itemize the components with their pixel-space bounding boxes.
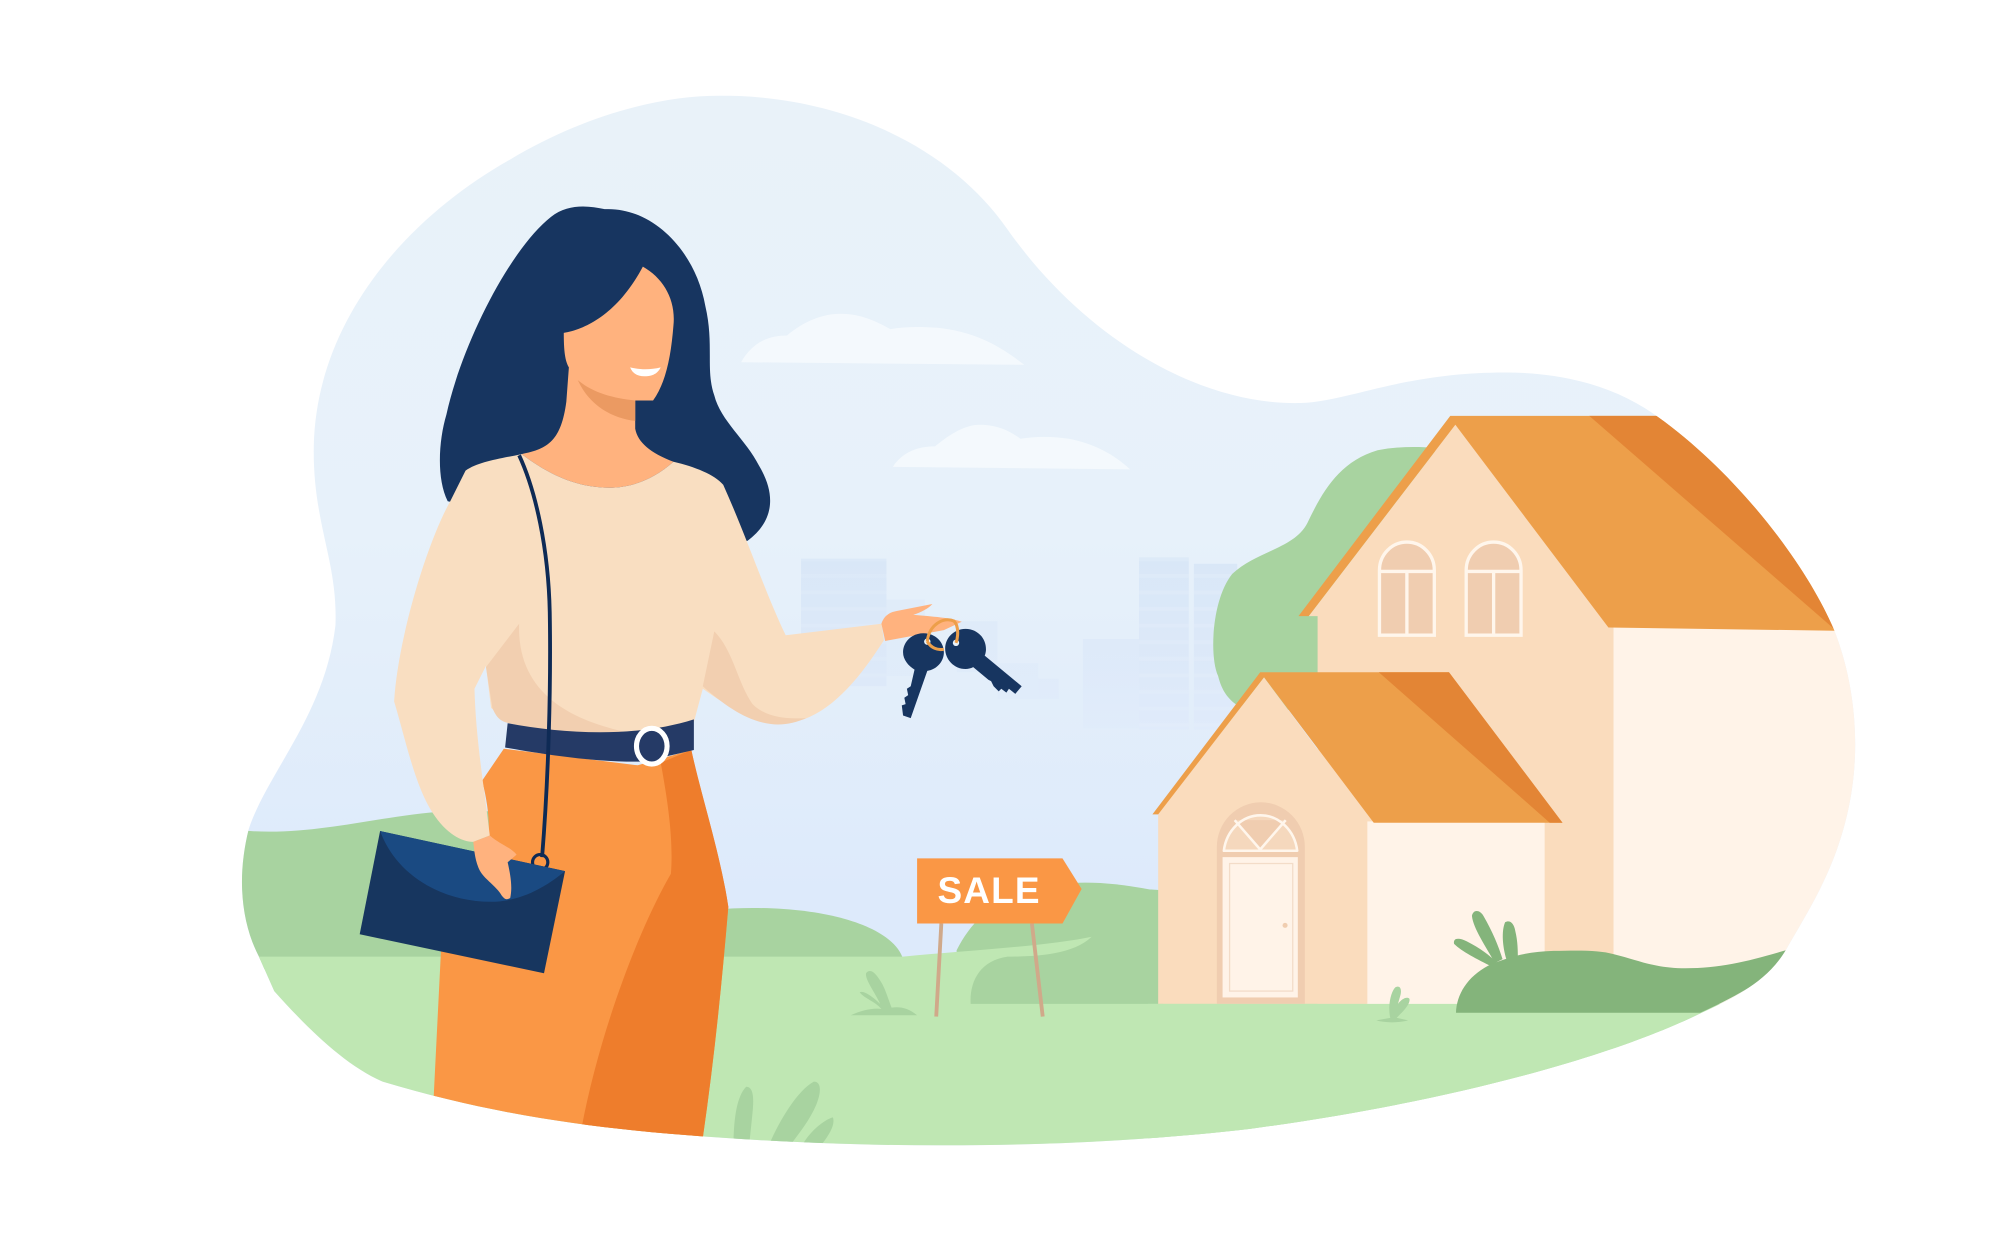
small house [1152, 672, 1562, 1005]
small house: gable wall [1158, 677, 1367, 1004]
large house: right wall [1610, 625, 1865, 1008]
key holes [924, 638, 959, 646]
belt buckle [636, 728, 667, 764]
large house: gable wall [1309, 425, 1614, 1004]
cloud: lower [893, 425, 1130, 469]
sky [217, 77, 1875, 1161]
plants: foreground [733, 1082, 833, 1148]
handbag body [360, 831, 565, 973]
keys in hand [881, 604, 1022, 718]
scene blob [217, 77, 1913, 1173]
shrub at front of house [1454, 911, 1786, 1013]
door fanlight [1224, 815, 1297, 851]
hand holding keys [881, 604, 962, 641]
plant: near sign [851, 971, 917, 1015]
hill: far left [242, 811, 489, 969]
key: right [945, 629, 1022, 694]
neck shadow [578, 380, 635, 421]
woman [360, 207, 884, 1138]
small house: roof [1152, 672, 1562, 823]
plant: near door [1376, 987, 1410, 1022]
large house: roof shade [1589, 416, 1834, 628]
door panel [1223, 857, 1298, 997]
bush: next to sign [971, 890, 1163, 1004]
bush: behind skirt [714, 908, 903, 959]
illustration: woman holding keys in front of a house for sale [242, 96, 1856, 1146]
strap ring [533, 855, 548, 870]
sweater shade: torso [486, 624, 626, 733]
door knob [1283, 923, 1288, 928]
shoulder strap [519, 455, 550, 857]
door frame [1217, 802, 1305, 1004]
sign label: SALE [938, 870, 1040, 911]
cloud: upper [741, 314, 1024, 365]
smile [630, 367, 661, 376]
large house: roof [1298, 416, 1834, 631]
hill: behind sign [956, 882, 1150, 952]
foreground blade [734, 1086, 754, 1140]
skirt [434, 749, 728, 1138]
small house: roof shade [1379, 672, 1562, 823]
key hole: left [924, 638, 930, 645]
window: right [1466, 542, 1521, 635]
shrub body [1456, 950, 1786, 1013]
shrub leaf [1472, 911, 1503, 963]
small house: right wall [1366, 821, 1545, 1005]
large house [1298, 416, 1913, 1008]
key hole: right [953, 640, 959, 646]
shrub leaf [1503, 921, 1518, 959]
handbag flap [380, 831, 565, 902]
skirt shade [582, 750, 728, 1138]
sign legs [936, 923, 1043, 1017]
door inner line [1230, 864, 1293, 991]
ground strip in front of houses [1148, 1004, 1720, 1138]
foreground blade [801, 1117, 833, 1148]
ground [259, 937, 1750, 1146]
shrub leaf [1454, 939, 1497, 967]
foreground blade [768, 1082, 820, 1148]
hand on bag [473, 835, 517, 899]
handbag [360, 831, 565, 973]
belt [505, 719, 694, 762]
sweater [394, 454, 884, 842]
sweater shade: arm [703, 631, 806, 724]
hair [440, 207, 770, 541]
tree behind house [1213, 447, 1441, 714]
door [1217, 802, 1305, 1004]
window: left [1379, 542, 1434, 635]
sign board [917, 858, 1082, 923]
key ring [927, 620, 958, 650]
city skyline [801, 558, 1237, 640]
sale sign [917, 858, 1082, 1017]
neck and face [522, 267, 674, 488]
key: left [902, 633, 944, 718]
